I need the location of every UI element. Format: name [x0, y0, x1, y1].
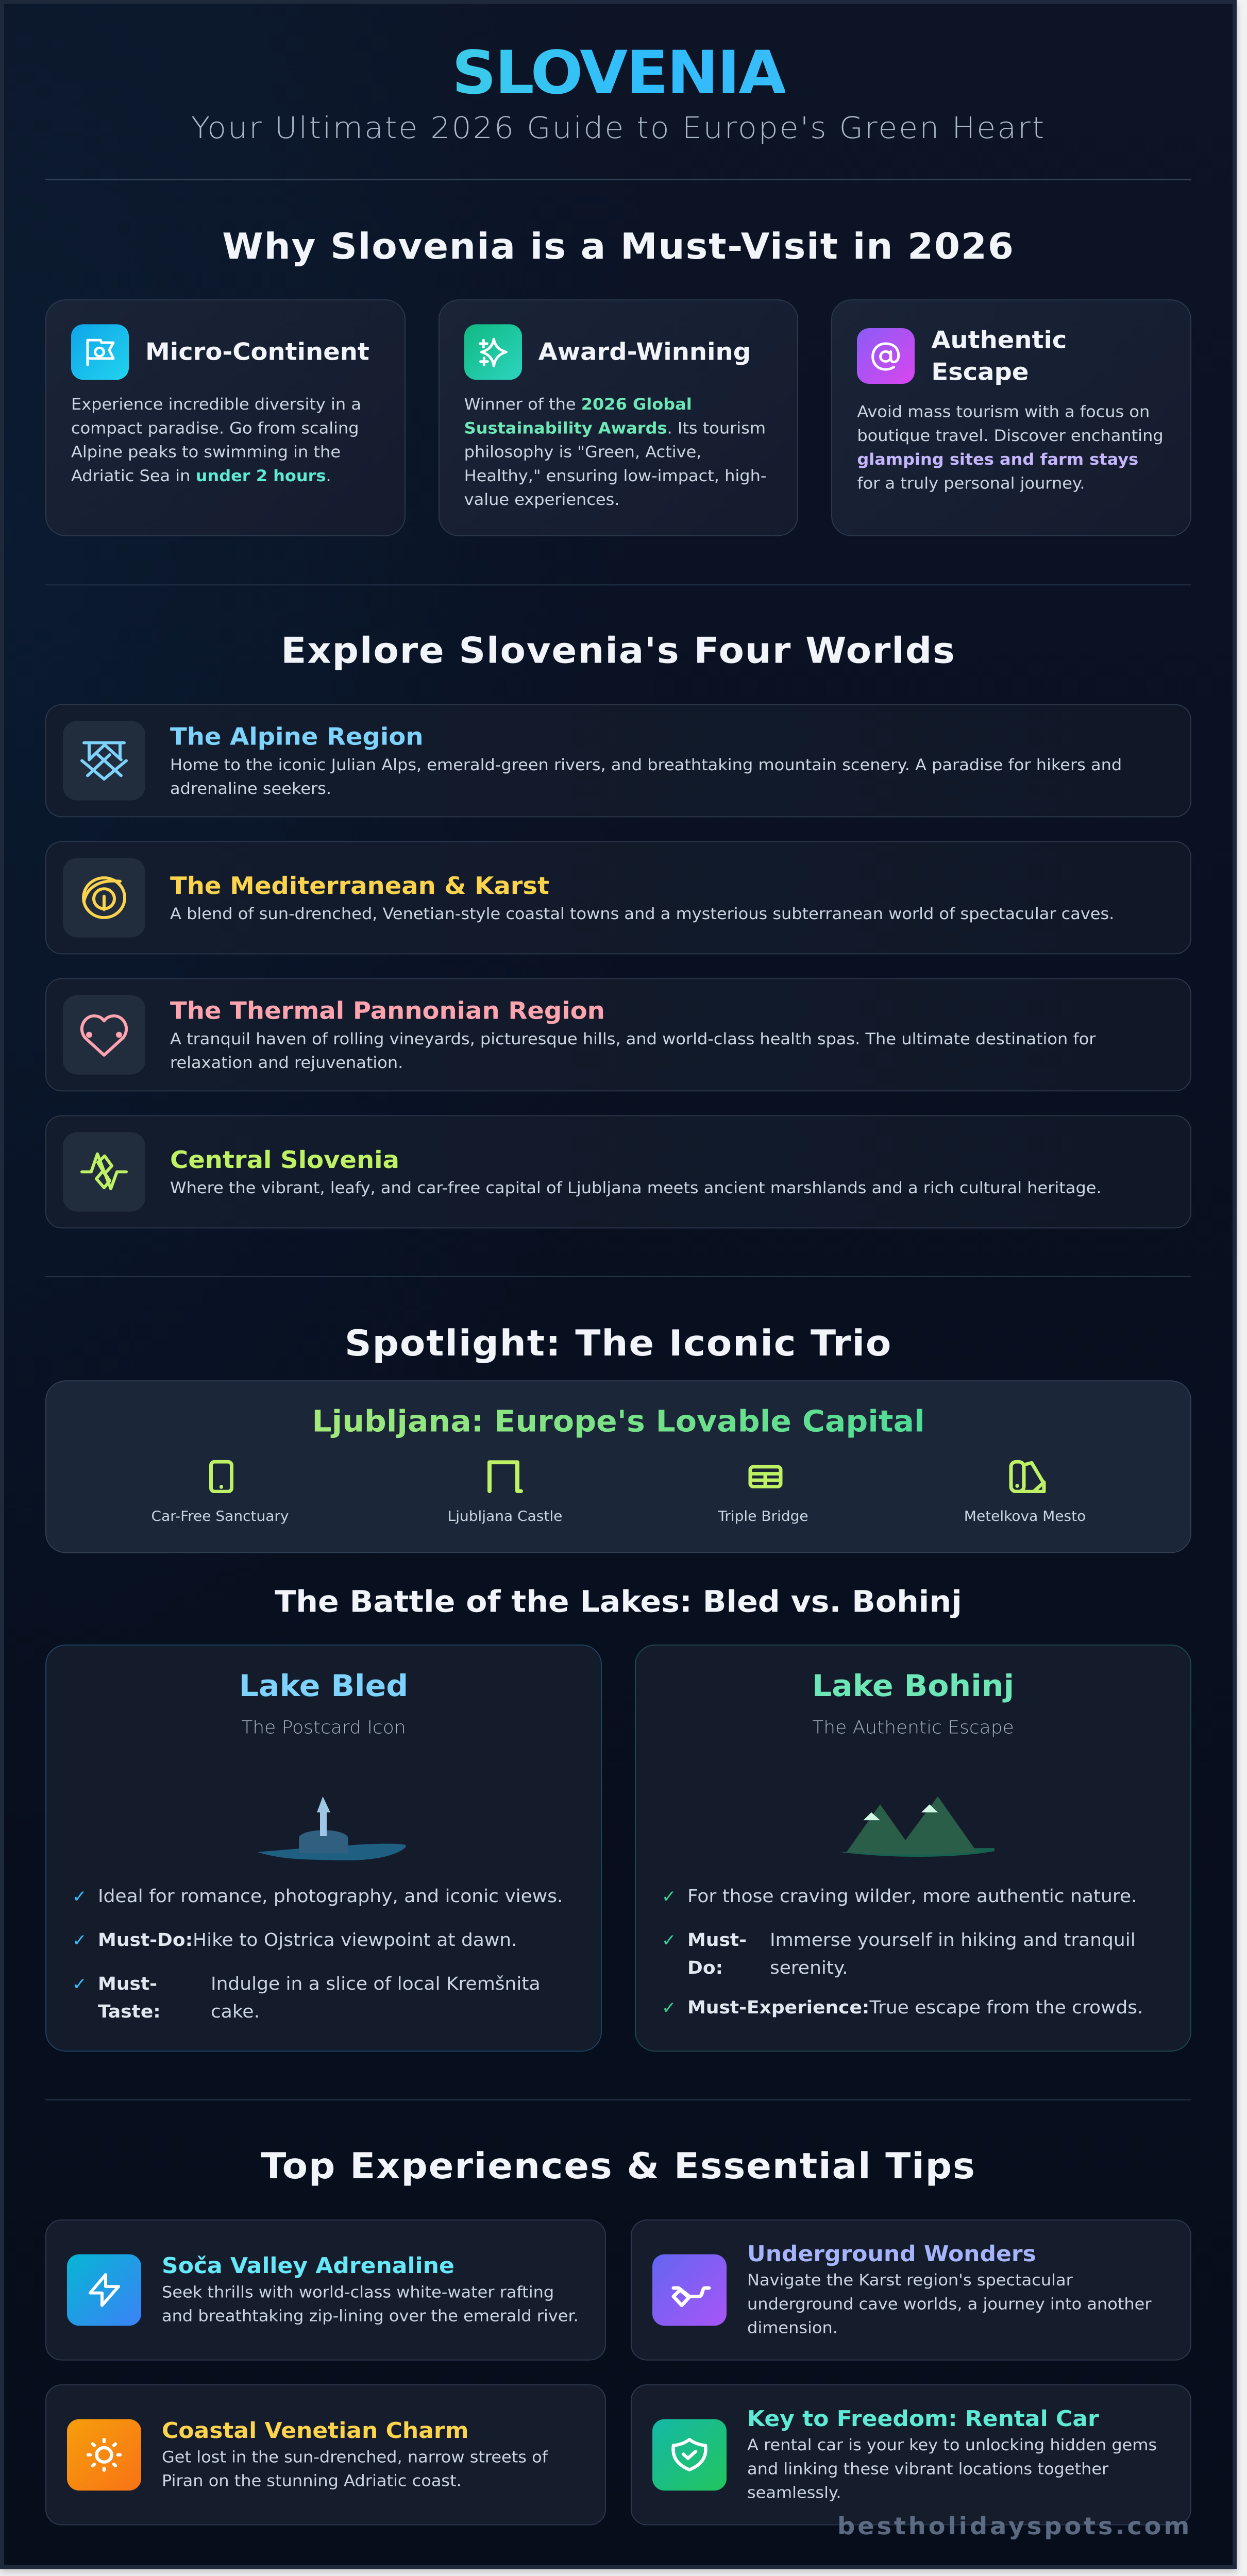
panel: Award-Winning — [439, 299, 798, 536]
list item text — [770, 1926, 1136, 1982]
panel: Coastal Venetian Charm — [45, 2384, 606, 2526]
card title: Authentic — [931, 326, 1067, 354]
check: ✓ — [72, 1930, 87, 1951]
heading: top experiences: Top Experiences & Essential Tips — [261, 2145, 976, 2187]
heading: four worlds: Explore Slovenia's Four Worlds — [281, 630, 956, 671]
tip title: Underground Wonders — [747, 2241, 1036, 2267]
region text: Home to the iconic Julian Alps, emerald-green rivers, and breathtaking mountain scenery. A paradise for hikers and — [170, 755, 1122, 774]
check: ✓ — [662, 1887, 676, 1907]
tip text: Get lost in the sun-drenched, narrow streets of — [162, 2447, 548, 2466]
watermark: bestholidayspots.com — [837, 2513, 1192, 2540]
icon: cave path — [652, 2254, 727, 2326]
card title: Escape — [931, 358, 1029, 386]
card text: Healthy," ensuring low-impact, high- — [464, 466, 766, 485]
tip text — [747, 2433, 1157, 2504]
lake subtitle: The Authentic Escape — [812, 1718, 1014, 1738]
icon: bolt — [67, 2254, 141, 2326]
label: Triple Bridge — [718, 1508, 808, 1524]
region title: The Mediterranean & Karst — [170, 872, 549, 900]
icon: castle — [487, 1460, 523, 1493]
list item: Ideal for romance, photography, and iconic views. — [98, 1886, 563, 1907]
region text: A blend of sun-drenched, Venetian-style coastal towns and a mysterious subterranean world of spectacular caves. — [170, 904, 1114, 923]
heading: spotlight: Spotlight: The Iconic Trio — [345, 1322, 892, 1364]
card text: Adriatic Sea in under 2 hours. — [71, 466, 331, 485]
region text: relaxation and rejuvenation. — [170, 1053, 403, 1072]
card text: Sustainability Awards. Its tourism — [464, 418, 766, 437]
card text — [71, 395, 361, 485]
check: ✓ — [662, 1930, 676, 1951]
icon: phone — [209, 1460, 233, 1493]
icon: flag — [71, 324, 129, 380]
panel: Alpine Region — [45, 704, 1191, 817]
card text: compact paradise. Go from scaling — [71, 418, 359, 437]
tip text: and breathtaking zip-lining over the emerald river. — [162, 2307, 579, 2325]
tip text — [162, 2280, 579, 2328]
icon: sun — [67, 2419, 141, 2490]
panel: Authentic Escape — [831, 299, 1191, 536]
region text — [170, 1029, 1096, 1072]
illustration: mountains — [840, 1797, 995, 1857]
region text: adrenaline seekers. — [170, 779, 331, 798]
icon: mountains — [63, 721, 145, 801]
heading: why visit: Why Slovenia is a Must-Visit in 2026 — [222, 226, 1015, 267]
check: ✓ — [72, 1974, 87, 1994]
list item: Must- — [687, 1930, 747, 1951]
icon: swatch — [1009, 1460, 1046, 1493]
card text — [464, 395, 766, 509]
list item: Must-Do:Hike to Ojstrica viewpoint at dawn. — [98, 1930, 517, 1951]
list item text: Immerse yourself in hiking and tranquil — [770, 1930, 1136, 1951]
list item: Do: — [687, 1958, 723, 1978]
panel heading: Ljubljana: Europe's Lovable Capital — [312, 1404, 925, 1439]
card text: Winner of the 2026 Global — [464, 395, 692, 414]
panel: Mediterranean & Karst — [45, 841, 1191, 954]
panel: Lake Bohinj — [635, 1645, 1191, 2052]
tip text: dimension. — [747, 2318, 838, 2337]
tip text: and linking these vibrant locations together — [747, 2460, 1108, 2478]
panel: Rental Car — [631, 2384, 1191, 2526]
icon: sparkle — [464, 324, 522, 380]
list item text: Indulge in a slice of local Kremšnita — [211, 1974, 541, 1994]
card text: for a truly personal journey. — [857, 473, 1085, 493]
label: Car-Free Sanctuary — [151, 1508, 289, 1524]
illustration: island church — [258, 1797, 406, 1860]
label: Metelkova Mesto — [964, 1508, 1086, 1524]
icon: spiral — [63, 858, 145, 938]
region text: Where the vibrant, leafy, and car-free capital of Ljubljana meets ancient marshlands and a rich cultural heritage. — [170, 1178, 1102, 1197]
panel: Micro-Continent — [45, 299, 406, 536]
label: Ljubljana Castle — [448, 1508, 562, 1524]
tip title: Key to Freedom: Rental Car — [747, 2406, 1099, 2432]
list item text — [211, 1974, 541, 2022]
card text — [857, 402, 1164, 493]
panel: Ljubljana — [45, 1380, 1191, 1553]
card text: boutique travel. Discover enchanting — [857, 426, 1164, 445]
check: ✓ — [662, 1998, 676, 2018]
tip text — [162, 2445, 548, 2493]
icon: heart — [63, 995, 145, 1075]
region text — [170, 755, 1122, 798]
list item: Taste: — [98, 2002, 161, 2022]
card title: Award-Winning — [538, 338, 751, 366]
list item — [687, 1930, 747, 1978]
region title: Central Slovenia — [170, 1146, 399, 1174]
tip text: Piran on the stunning Adriatic coast. — [162, 2471, 462, 2490]
icon: pulse — [63, 1132, 145, 1212]
lake title: Lake Bohinj — [812, 1669, 1014, 1704]
icon: bridge — [748, 1465, 782, 1488]
tip title: Soča Valley Adrenaline — [162, 2253, 454, 2279]
check: ✓ — [72, 1887, 87, 1907]
tip text: Navigate the Karst region's spectacular — [747, 2270, 1073, 2290]
list item text: serenity. — [770, 1958, 848, 1978]
panel: Underground Wonders — [631, 2219, 1191, 2361]
tip text: A rental car is your key to unlocking hidden gems — [747, 2435, 1157, 2454]
card text: Avoid mass tourism with a focus on — [857, 402, 1150, 421]
list item: For those craving wilder, more authentic nature. — [687, 1886, 1137, 1907]
lake title: Lake Bled — [239, 1669, 408, 1704]
list item: Must- — [98, 1974, 157, 1994]
card text: Alpine peaks to swimming in the — [71, 443, 341, 461]
card title — [931, 326, 1067, 386]
card text: glamping sites and farm stays — [857, 450, 1138, 469]
icon: shield check — [652, 2419, 727, 2490]
tip text: seamlessly. — [747, 2483, 841, 2502]
list item — [98, 1974, 161, 2022]
tip text: Seek thrills with world-class white-water rafting — [162, 2282, 554, 2301]
panel: Thermal Pannonian — [45, 978, 1191, 1091]
region title: The Thermal Pannonian Region — [170, 997, 605, 1025]
card title: Micro-Continent — [145, 338, 369, 366]
list item: Must-Experience:True escape from the crowds. — [687, 1997, 1143, 2018]
region text: A tranquil haven of rolling vineyards, picturesque hills, and world-class health spas. The ultimate destination for — [170, 1029, 1096, 1048]
icon: at symbol — [857, 328, 915, 384]
card text: Experience incredible diversity in a — [71, 395, 361, 414]
tip title: Coastal Venetian Charm — [162, 2418, 468, 2444]
tip text: underground cave worlds, a journey into another — [747, 2295, 1151, 2313]
panel: Lake Bled — [45, 1645, 602, 2052]
tip text — [747, 2268, 1151, 2340]
lake subtitle: The Postcard Icon — [241, 1718, 406, 1738]
panel: Soča Valley — [45, 2219, 606, 2361]
subtitle: Your Ultimate 2026 Guide to Europe's Green Heart — [191, 111, 1046, 145]
region title: The Alpine Region — [170, 723, 424, 751]
card text: value experiences. — [464, 490, 619, 509]
title: SLOVENIA — [452, 39, 785, 108]
list item text: cake. — [211, 2002, 260, 2022]
card text: philosophy is "Green, Active, — [464, 443, 701, 461]
panel: Central Slovenia — [45, 1115, 1191, 1228]
heading: battle of the lakes: The Battle of the Lakes: Bled vs. Bohinj — [275, 1584, 962, 1619]
